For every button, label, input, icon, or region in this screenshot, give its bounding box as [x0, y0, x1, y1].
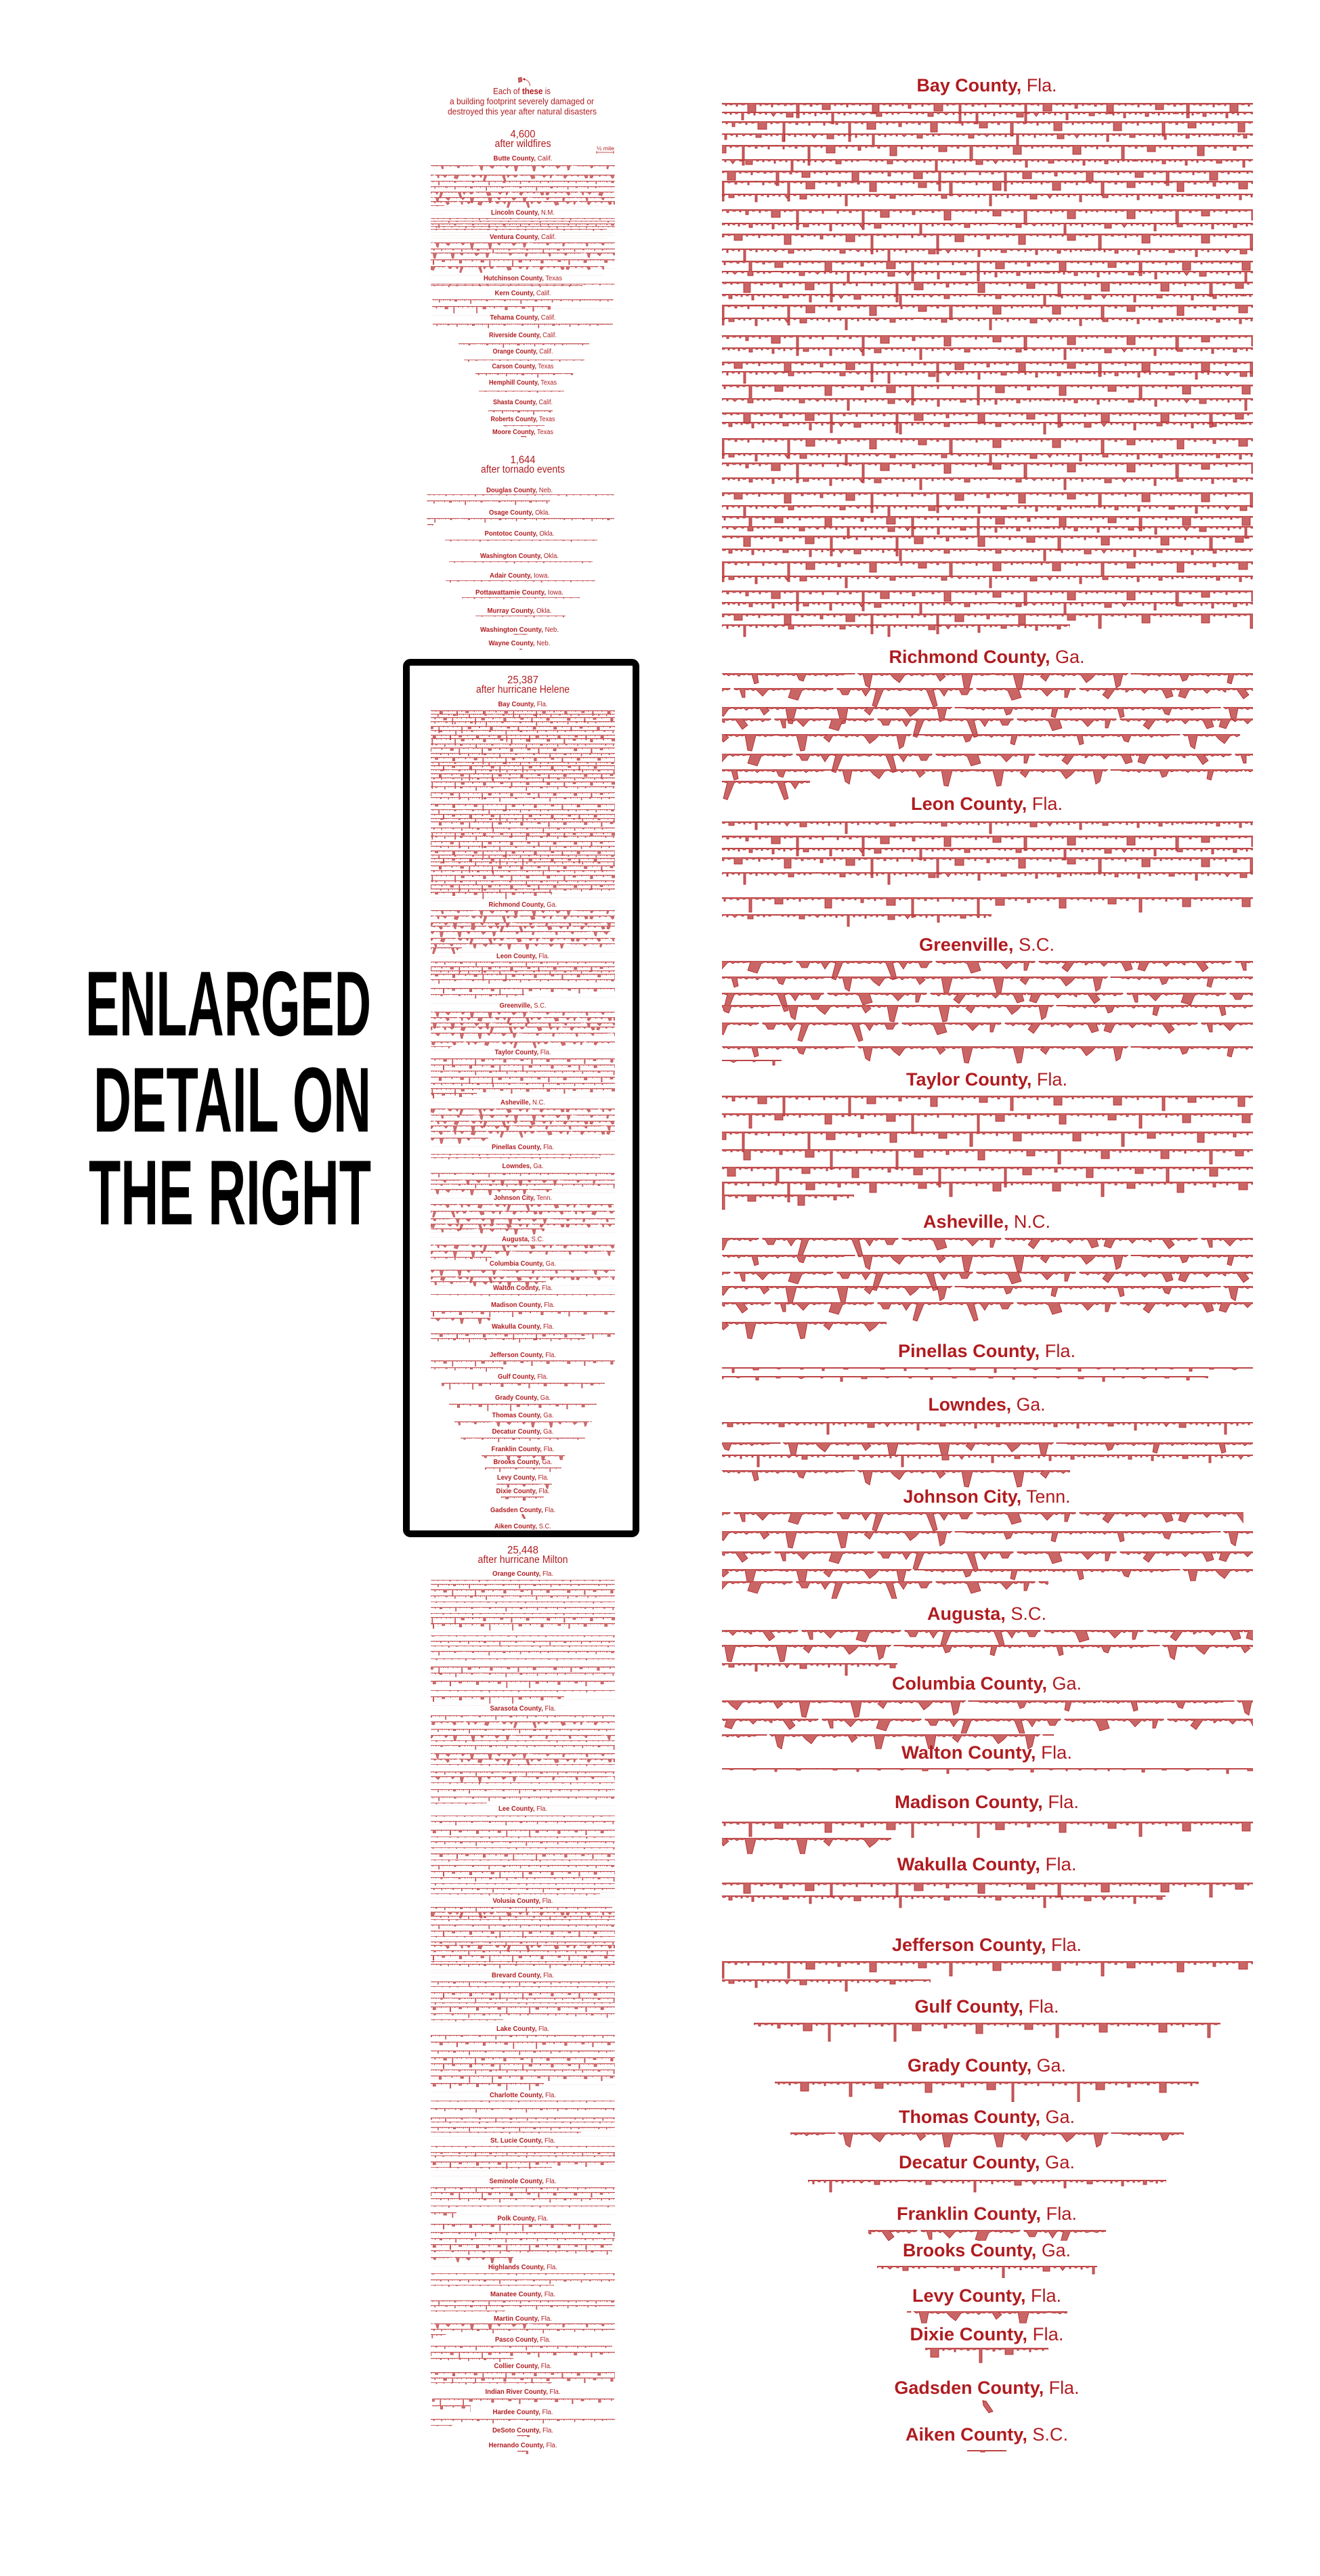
heading: 25,448 after hurricane Milton: 25,448 [507, 1545, 538, 1556]
heading: 25,448 after hurricane Milton: after hurricane Milton [478, 1554, 568, 1566]
county row: Madison County overview [431, 1302, 615, 1324]
county row: Carson County [475, 363, 573, 379]
county row: Richmond County overview [431, 901, 615, 957]
county row: Pasco County: Pasco County, Fla. [495, 2336, 551, 2344]
county row: Highlands County [431, 2264, 615, 2290]
enlarged county: Madison County [722, 1792, 1253, 1854]
county row: Wayne County: Wayne County, Neb. [489, 640, 550, 647]
county row: Pottawattamie County [462, 589, 580, 601]
enlarged county: Grady County: Grady County, Ga. [908, 2055, 1066, 2076]
county row: Decatur County overview: Decatur County, Ga. [492, 1428, 554, 1436]
county row: Manatee County: Manatee County, Fla. [490, 2291, 555, 2298]
county row: Bay County overview: Bay County, Fla. [498, 701, 547, 708]
intro text: Each of these is [493, 87, 551, 96]
county row: Ventura County [431, 234, 615, 276]
enlarged county: Lowndes: Lowndes, Ga. [928, 1394, 1046, 1415]
county row: Walton County overview [431, 1285, 615, 1300]
enlarged county: Taylor County: Taylor County, Fla. [906, 1069, 1067, 1090]
county row: St. Lucie County: St. Lucie County, Fla. [490, 2137, 555, 2145]
enlarged county: Asheville [722, 1211, 1253, 1349]
callout text: enlarged detail on the right [85, 952, 371, 1244]
intro text [448, 87, 597, 116]
heading: 25,448 after hurricane Milton [478, 1545, 568, 1566]
county row: Brevard County [431, 1972, 615, 2026]
enlarged county: Gadsden County: Gadsden County, Fla. [894, 2378, 1080, 2398]
county row: Sarasota County [431, 1705, 615, 1808]
county row: Kern County: Kern County, Calif. [494, 290, 551, 297]
enlarged county: Gadsden County [894, 2378, 1080, 2413]
county row: Kern County [432, 290, 614, 316]
enlarged county: Columbia County: Columbia County, Ga. [892, 1673, 1082, 1694]
county row: Richmond County overview: Richmond County, Ga. [489, 901, 557, 909]
county row: Sarasota County: Sarasota County, Fla. [490, 1705, 555, 1713]
heading: 4,600 after wildfires: 4,600 [511, 129, 536, 140]
enlarged county: Franklin County [868, 2204, 1106, 2241]
county row: Lincoln County: Lincoln County, N.M. [491, 209, 555, 217]
enlarged county: Taylor County [722, 1069, 1253, 1222]
county row: Bay County overview [431, 701, 615, 901]
county row: Lincoln County [431, 209, 615, 238]
county row: Brevard County: Brevard County, Fla. [492, 1972, 554, 1979]
county row: Thomas County overview: Thomas County, Ga. [492, 1412, 554, 1419]
county row: Levy County overview: Levy County, Fla. [497, 1474, 549, 1482]
enlarged county: Levy County: Levy County, Fla. [912, 2285, 1061, 2306]
county row: Pinellas County overview [431, 1144, 615, 1163]
enlarged county: Leon County: Leon County, Fla. [911, 794, 1063, 814]
county row: Charlotte County [431, 2092, 615, 2139]
county row: Hemphill County: Hemphill County, Texas [489, 379, 557, 387]
enlarged county: Pinellas County [722, 1341, 1253, 1387]
enlarged county: Walton County: Walton County, Fla. [901, 1742, 1072, 1763]
county row: Roberts County: Roberts County, Texas [490, 416, 555, 423]
county row: Jefferson County overview: Jefferson County, Fla. [490, 1352, 556, 1359]
county row: Taylor County overview: Taylor County, Fla. [494, 1049, 551, 1056]
heading: 4,600 after wildfires [494, 129, 551, 150]
county row: Osage County [427, 509, 614, 528]
enlarged county: Thomas County: Thomas County, Ga. [899, 2107, 1075, 2127]
county row: Riverside County: Riverside County, Calif. [489, 332, 557, 339]
county row: Highlands County: Highlands County, Fla. [488, 2264, 557, 2271]
county row: Asheville overview [431, 1099, 615, 1147]
enlarged county: Lowndes [722, 1394, 1253, 1489]
county row: Hernando County: Hernando County, Fla. [489, 2442, 557, 2449]
county row: Osage County: Osage County, Okla. [489, 509, 550, 517]
county row: Washington County, Okla.: Washington County, Okla. [480, 553, 559, 560]
heading: 25,387 after hurricane Helene [476, 674, 570, 695]
enlarged county: Aiken County [906, 2424, 1068, 2454]
panel: hurricane Helene overview [431, 674, 615, 1530]
county row: Lake County [431, 2025, 615, 2092]
county row: Lee County: Lee County, Fla. [498, 1805, 547, 1813]
county row: Adair County [446, 572, 595, 583]
county row: Gadsden County overview [490, 1507, 555, 1519]
county row: Collier County [431, 2363, 615, 2388]
county row: Orange County: Orange County, Fla. [492, 1570, 553, 1578]
enlarged county: Wakulla County: Wakulla County, Fla. [897, 1854, 1077, 1874]
county row: Walton County overview: Walton County, Fla. [493, 1285, 553, 1292]
county row: Taylor County overview [431, 1049, 615, 1102]
county row: Hernando County [489, 2442, 557, 2454]
enlarged county: Richmond County: Richmond County, Ga. [889, 647, 1085, 667]
heading: 4,600 after wildfires: after wildfires [494, 138, 551, 150]
county row: Washington County, Neb.: Washington County, Neb. [480, 626, 559, 634]
enlarged county: Leon County [722, 794, 1253, 941]
county row: Charlotte County: Charlotte County, Fla. [490, 2092, 556, 2099]
enlarged county: Greenville: Greenville, S.C. [919, 935, 1055, 955]
county row: Riverside County [459, 332, 589, 349]
county row: Indian River County [432, 2388, 614, 2412]
county row: Franklin County overview: Franklin County, Fla. [492, 1446, 554, 1453]
county row: Butte County [431, 155, 615, 215]
county row: Seminole County [431, 2178, 615, 2218]
county row: Indian River County: Indian River County, Fla. [485, 2388, 561, 2396]
county row: Lake County: Lake County, Fla. [496, 2025, 549, 2033]
county row: Brooks County overview: Brooks County, Ga. [493, 1459, 553, 1466]
county row: Volusia County: Volusia County, Fla. [493, 1897, 553, 1905]
county row: Brooks County overview [485, 1459, 561, 1472]
county row: Hardee County: Hardee County, Fla. [493, 2409, 553, 2416]
county row: Douglas County [427, 487, 614, 507]
county row: Johnson City overview [431, 1195, 615, 1238]
callout text: enlarged detail on the right: DETAIL ON [93, 1048, 371, 1151]
callout text: enlarged detail on the right: ENLARGED [85, 952, 371, 1055]
county row: Dixie County overview [496, 1488, 550, 1502]
enlarged county: Brooks County [877, 2240, 1097, 2278]
county row: Johnson City overview: Johnson City, Tenn. [494, 1195, 552, 1202]
county row: Wayne County [489, 640, 550, 651]
county row: Volusia County [431, 1897, 615, 1973]
county row: Butte County: Butte County, Calif. [493, 155, 553, 163]
heading: 1,644 after tornado events [481, 454, 565, 475]
county row: Polk County [431, 2215, 615, 2267]
county row: Shasta County: Shasta County, Calif. [493, 399, 553, 406]
enlarged county: Augusta [722, 1604, 1253, 1677]
county row: Asheville overview: Asheville, N.C. [501, 1099, 545, 1107]
county row: Shasta County [488, 399, 553, 416]
heading: 25,387 after hurricane Helene: after hurricane Helene [476, 684, 570, 695]
county row: Pottawattamie County: Pottawattamie County, Iowa. [475, 589, 563, 597]
heading: 1,644 after tornado events: 1,644 [511, 454, 536, 466]
county row: Greenville overview: Greenville, S.C. [500, 1002, 546, 1010]
enlarged county: Gulf County [754, 1996, 1220, 2042]
enlarged county: Aiken County: Aiken County, S.C. [906, 2424, 1068, 2445]
enlarged county: Decatur County: Decatur County, Ga. [899, 2152, 1075, 2172]
county row: Carson County: Carson County, Texas [492, 363, 554, 370]
enlarged county: Madison County: Madison County, Fla. [895, 1792, 1079, 1812]
enlarged county: Johnson City: Johnson City, Tenn. [903, 1486, 1070, 1507]
county row: St. Lucie County [431, 2137, 615, 2176]
county row: Hutchinson County [431, 275, 615, 289]
county row: Leon County overview [431, 953, 615, 1004]
county row: Tehama County: Tehama County, Calif. [490, 314, 555, 322]
county row: DeSoto County: DeSoto County, Fla. [492, 2427, 553, 2434]
enlarged county: Dixie County: Dixie County, Fla. [910, 2324, 1063, 2344]
county row: Lowndes overview [431, 1163, 615, 1199]
county row: Orange County (wildfire): Orange County, Calif. [493, 348, 553, 356]
callout frame: enlarged area highlight [406, 662, 636, 1534]
county row: Pontotoc County [445, 530, 597, 544]
intro text: destroyed this year after natural disasters [448, 107, 597, 116]
enlarged county: Levy County [907, 2285, 1067, 2323]
county row: Lowndes overview: Lowndes, Ga. [503, 1163, 543, 1170]
county row: Thomas County overview [454, 1412, 592, 1428]
enlarged county: Greenville [722, 935, 1253, 1073]
county row: Moore County: Moore County, Texas [492, 429, 553, 436]
county row: Decatur County overview [461, 1428, 585, 1444]
county row: Ventura County: Ventura County, Calif. [490, 234, 556, 241]
intro text: a building footprint severely damaged or [450, 97, 594, 106]
county row: Grady County overview: Grady County, Ga. [495, 1394, 551, 1402]
enlarged county: Gulf County: Gulf County, Fla. [914, 1996, 1059, 2017]
enlarged county: Wakulla County [722, 1854, 1253, 1914]
county row: Columbia County overview [431, 1260, 615, 1289]
county row: Martin County [431, 2315, 615, 2338]
county row: Polk County: Polk County, Fla. [497, 2215, 549, 2223]
enlarged county: Franklin County: Franklin County, Fla. [897, 2204, 1077, 2224]
county row: Gulf County overview [442, 1373, 605, 1390]
panel: enlarged Helene detail [722, 75, 1253, 2454]
county row: Greenville overview [431, 1002, 615, 1051]
enlarged county: Richmond County [722, 647, 1253, 808]
enlarged county: Augusta: Augusta, S.C. [927, 1604, 1046, 1624]
county row: Augusta overview [431, 1236, 615, 1262]
panel: tornado events [427, 454, 614, 651]
enlarged county: Bay County: Bay County, Fla. [917, 75, 1057, 95]
county row: Tehama County [433, 314, 613, 330]
county row: Seminole County: Seminole County, Fla. [489, 2178, 557, 2185]
county row: Hemphill County [479, 379, 564, 396]
county row: Leon County overview: Leon County, Fla. [496, 953, 549, 960]
county row: Orange County (wildfire) [464, 348, 584, 365]
county row: Washington County, Okla. [449, 553, 593, 565]
county row: Columbia County overview: Columbia County, Ga. [490, 1260, 556, 1268]
icon: single building footprint with arrow [518, 77, 530, 86]
county row: Franklin County overview [482, 1446, 565, 1460]
county row: Murray County: Murray County, Okla. [488, 607, 551, 615]
heading: 1,644 after tornado events: after tornado events [481, 464, 565, 475]
enlarged county: Columbia County [722, 1673, 1253, 1749]
county row: Pontotoc County: Pontotoc County, Okla. [485, 530, 554, 538]
enlarged county: Johnson City [722, 1486, 1253, 1599]
enlarged county: Bay County [722, 75, 1253, 651]
county row: Pasco County [431, 2336, 615, 2362]
county row: Augusta overview: Augusta, S.C. [502, 1236, 544, 1243]
county row: Hardee County [431, 2409, 615, 2428]
county row: Madison County overview: Madison County, Fla. [491, 1302, 555, 1309]
enlarged county: Dixie County [910, 2324, 1063, 2364]
county row: Orange County [431, 1570, 615, 1706]
callout text: enlarged detail on the right: THE RIGHT [89, 1141, 371, 1244]
county label: Aiken County overview: Aiken County, S.C. [494, 1523, 551, 1530]
county row: Adair County: Adair County, Iowa. [490, 572, 549, 580]
enlarged county: Jefferson County: Jefferson County, Fla. [892, 1935, 1082, 1955]
scale bar: half mile: ½ mile [597, 145, 614, 152]
heading: 25,387 after hurricane Helene: 25,387 [507, 674, 538, 686]
county row: Hutchinson County: Hutchinson County, Texas [484, 275, 562, 282]
county row: Manatee County [431, 2291, 615, 2316]
county row: Douglas County: Douglas County, Neb. [486, 487, 553, 494]
county row: Levy County overview [496, 1474, 552, 1489]
county row: Wakulla County overview [431, 1323, 615, 1345]
county row: Dixie County overview: Dixie County, Fla. [496, 1488, 550, 1495]
enlarged county: Walton County [722, 1742, 1253, 1783]
county row: Collier County: Collier County, Fla. [494, 2363, 551, 2370]
county row: Grady County overview [449, 1394, 597, 1412]
enlarged county: Thomas County [790, 2107, 1184, 2147]
enlarged county: Asheville: Asheville, N.C. [923, 1211, 1050, 1232]
county row: Jefferson County overview [431, 1352, 615, 1372]
county row: Wakulla County overview: Wakulla County, Fla. [492, 1323, 554, 1331]
enlarged county: Brooks County: Brooks County, Ga. [903, 2240, 1071, 2260]
county row: Pinellas County overview: Pinellas County, Fla. [492, 1144, 554, 1151]
enlarged county: Decatur County [808, 2152, 1166, 2197]
county row: Roberts County [490, 416, 555, 429]
county row: Gadsden County overview: Gadsden County, Fla. [490, 1507, 555, 1514]
panel: intro and wildfires [431, 77, 615, 439]
panel: hurricane Milton [431, 1545, 615, 2454]
county row: Murray County [475, 607, 566, 619]
county row: Gulf County overview: Gulf County, Fla. [498, 1373, 548, 1381]
county row: Martin County: Martin County, Fla. [494, 2315, 552, 2323]
enlarged county: Grady County [775, 2055, 1199, 2102]
enlarged county: Pinellas County: Pinellas County, Fla. [898, 1341, 1076, 1361]
enlarged county: Jefferson County [722, 1935, 1253, 1992]
county row: Lee County [431, 1805, 615, 1903]
